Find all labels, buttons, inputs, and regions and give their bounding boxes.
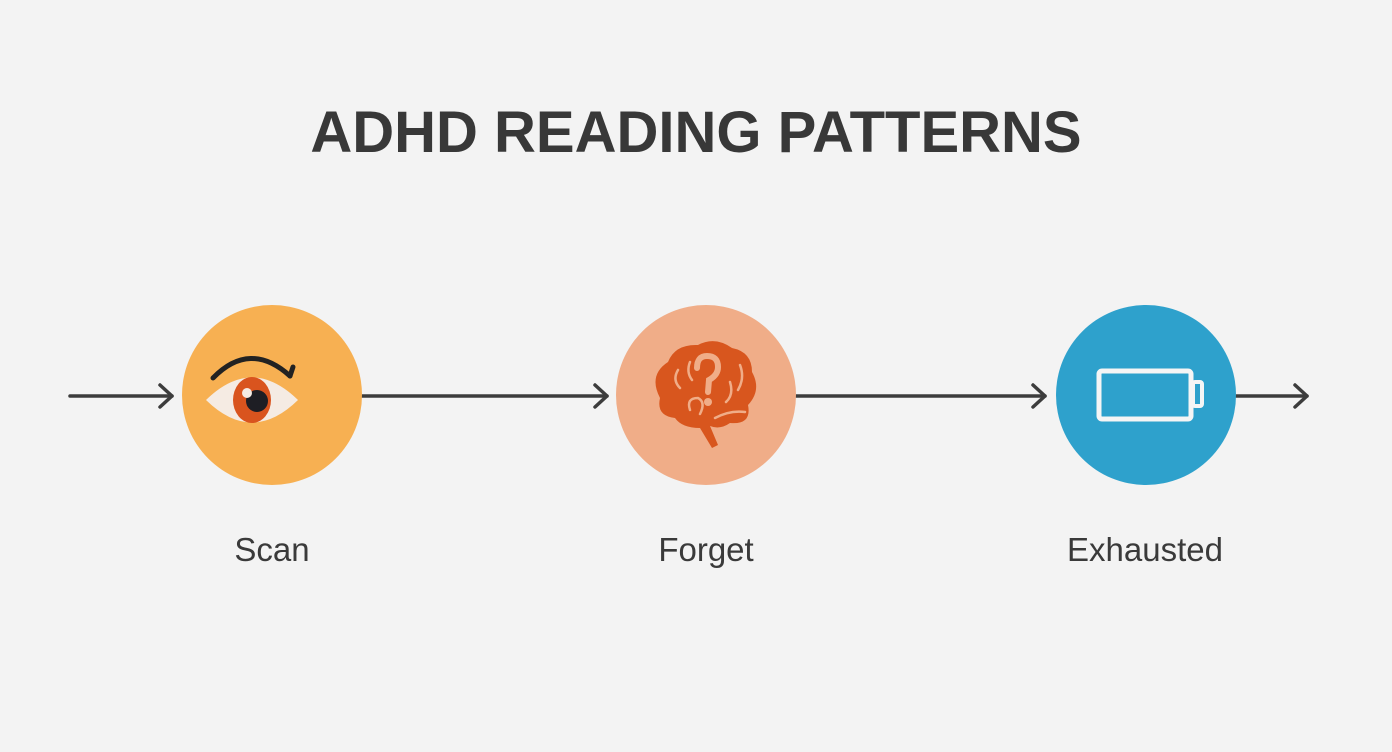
label: exhausted: Exhausted [1067, 531, 1223, 568]
arrow: entry [70, 385, 172, 407]
icon: eye circle [182, 305, 362, 485]
label: scan: Scan [234, 531, 310, 568]
icon: battery circle [1056, 305, 1236, 485]
arrow: forget to exhausted [796, 385, 1045, 407]
arrow: scan to forget [362, 385, 607, 407]
icon: brain circle [616, 305, 796, 485]
title: ADHD READING PATTERNS [310, 100, 1082, 165]
arrow: exit [1236, 385, 1307, 407]
label: forget: Forget [658, 531, 754, 568]
